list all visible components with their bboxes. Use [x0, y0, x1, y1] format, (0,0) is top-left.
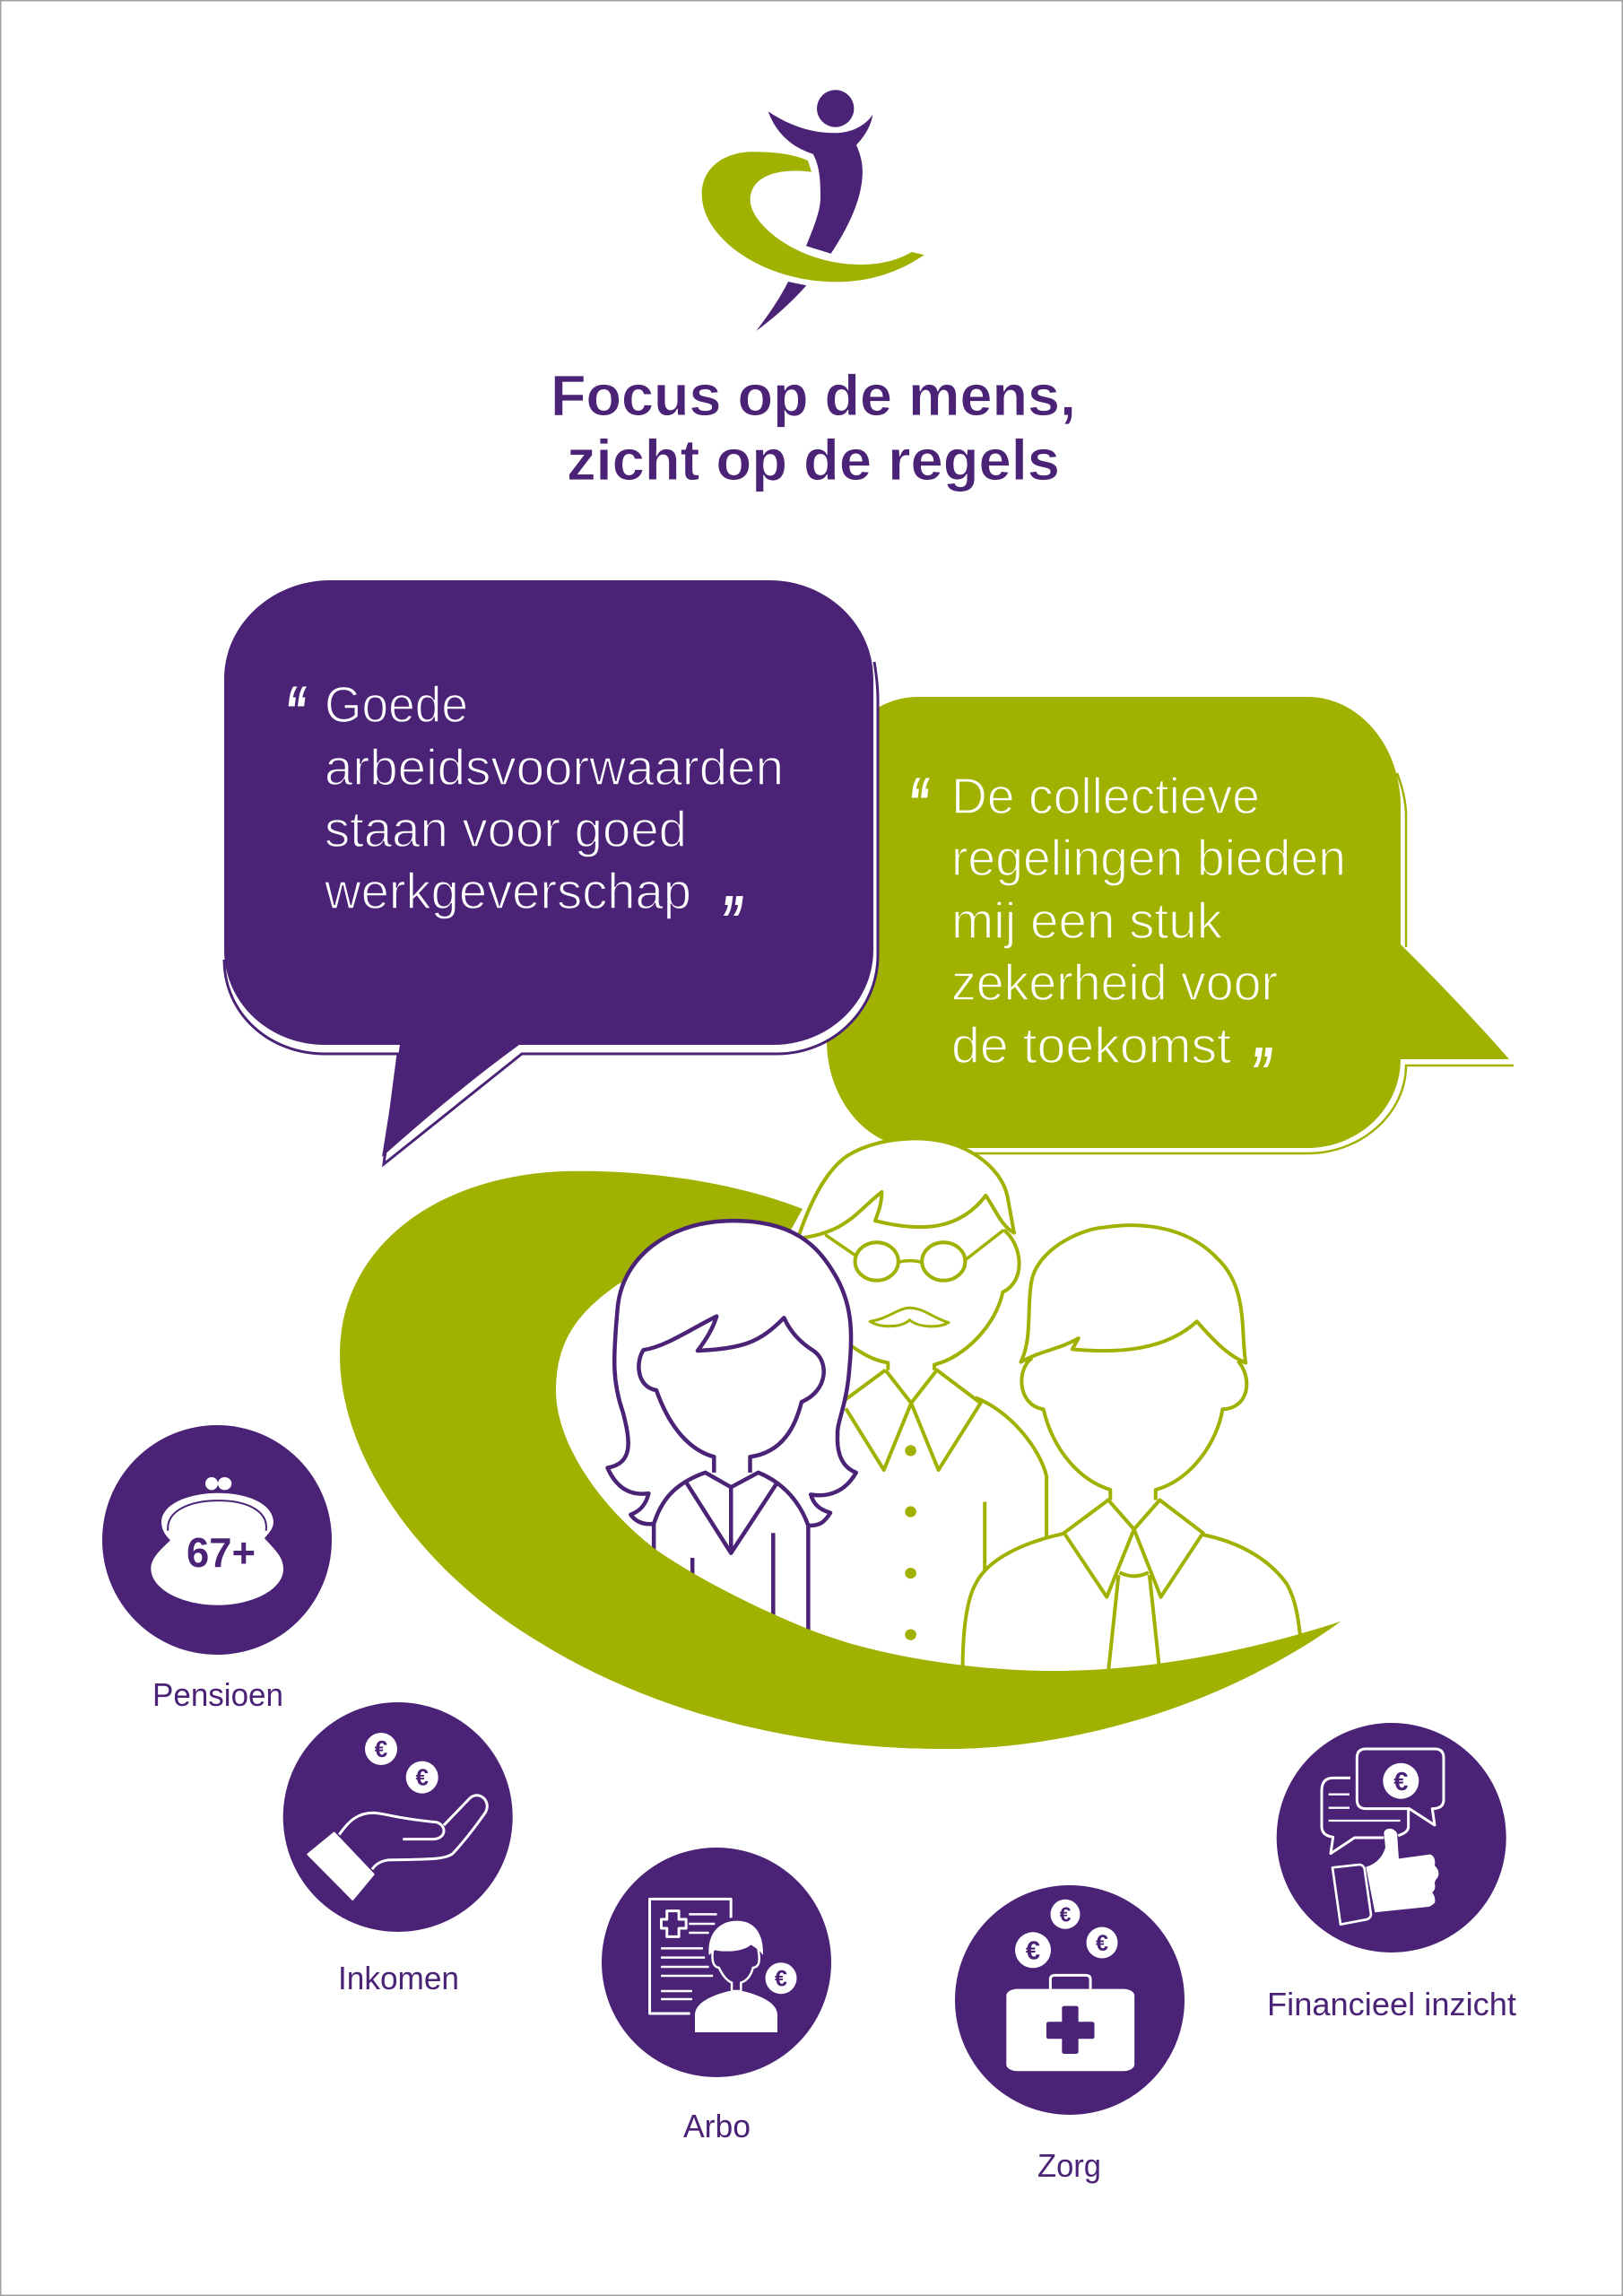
label: financieel inzicht: Financieel inzicht: [1267, 1986, 1516, 2022]
icon: financieel inzicht: €: [1393, 1768, 1408, 1796]
title: [551, 363, 1076, 492]
opening quote: “: [284, 671, 307, 750]
mustache: [870, 1308, 949, 1326]
quote text: collectieve regelingen: regelingen bieden: [951, 830, 1346, 887]
man with glasses: [798, 1138, 1046, 1661]
icon: inkomen: €: [415, 1764, 429, 1791]
quote text: collectieve regelingen: [951, 768, 1346, 1074]
green swoosh behind people: [340, 1171, 1341, 1749]
quote text: collectieve regelingen: mij een stuk: [951, 892, 1222, 950]
icon: pensioen: 67+: [187, 1529, 256, 1576]
opening quote: “: [907, 762, 930, 841]
woman: [607, 1221, 856, 1661]
icon: zorg: €: [1096, 1931, 1108, 1956]
icon: zorg: €: [1060, 1903, 1072, 1926]
icon: financieel inzicht: [1277, 1723, 1506, 1952]
icon: inkomen: [283, 1702, 513, 1932]
icon: pensioen: [102, 1425, 332, 1655]
icon: zorg: €: [1026, 1937, 1040, 1966]
man with tie: [963, 1225, 1301, 1672]
label: pensioen: Pensioen: [152, 1676, 283, 1713]
icon: arbo: [602, 1848, 831, 2077]
quote text: collectieve regelingen: zekerheid voor: [951, 954, 1278, 1012]
quote text: arbeidsvoorwaarden: staan voor goed: [325, 801, 687, 858]
title: Focus op de mens,: [551, 363, 1076, 428]
icon: zorg: [955, 1885, 1185, 2115]
panel: purple speech bubble: [224, 580, 878, 1164]
quote text: arbeidsvoorwaarden: Goede: [325, 676, 468, 734]
shirt buttons: [905, 1445, 916, 1640]
closing quote: „: [723, 841, 748, 920]
quote text: collectieve regelingen: de toekomst: [951, 1017, 1231, 1074]
icon: arbo: €: [775, 1966, 787, 1991]
green swoosh over people: [399, 1516, 1341, 1749]
quote text: collectieve regelingen: De collectieve: [951, 768, 1260, 825]
closing quote: „: [1253, 993, 1277, 1072]
quote text: arbeidsvoorwaarden: [324, 676, 784, 920]
label: arbo: Arbo: [683, 2108, 751, 2144]
people illustration: [607, 1138, 1301, 1672]
label: zorg: Zorg: [1037, 2147, 1101, 2184]
glasses: [825, 1230, 1003, 1281]
quote text: arbeidsvoorwaarden: arbeidsvoorwaarden: [325, 739, 784, 796]
quote text: arbeidsvoorwaarden: werkgeverschap: [324, 863, 691, 920]
title: zicht op de regels: [567, 428, 1060, 492]
panel: green speech bubble: [827, 697, 1514, 1153]
logo: [702, 90, 924, 331]
icon: inkomen: €: [375, 1735, 387, 1762]
label: inkomen: Inkomen: [338, 1960, 459, 1996]
